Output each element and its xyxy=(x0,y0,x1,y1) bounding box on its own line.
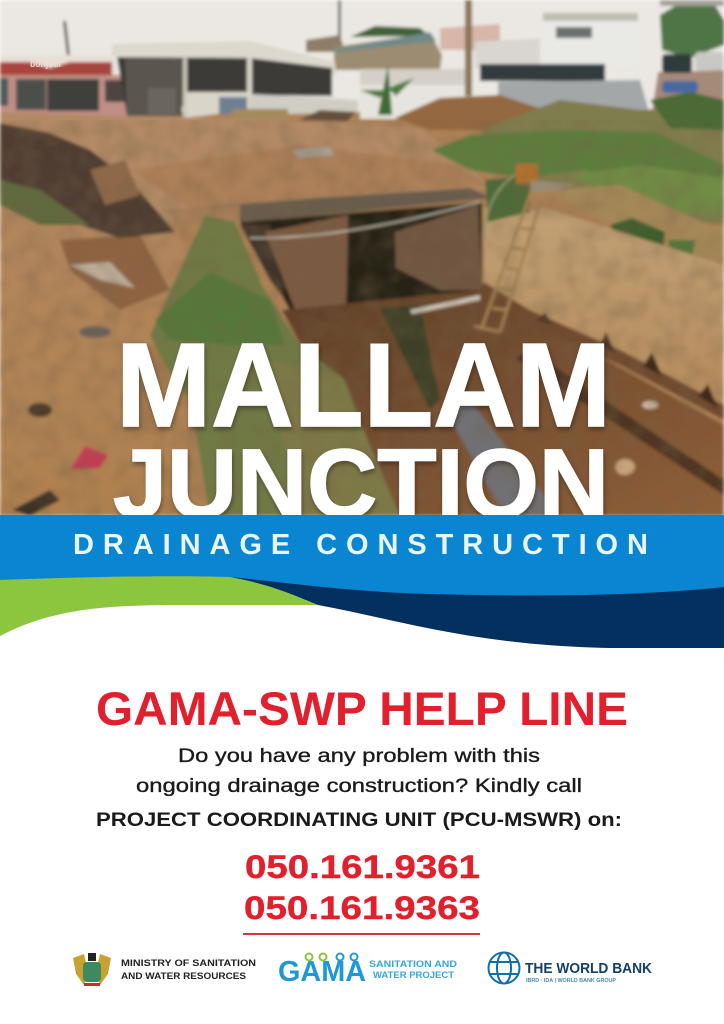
logo: GAMA Sanitation and Water Project: GAMA xyxy=(278,956,366,988)
culvert opening xyxy=(240,202,482,310)
help line heading: GAMA-SWP HELP LINE xyxy=(96,682,628,735)
help line instructions: PROJECT COORDINATING UNIT (PCU-MSWR) on: xyxy=(96,809,622,831)
lower left dirt xyxy=(2,208,164,242)
soil heap behind culvert xyxy=(395,95,545,130)
icon: Ghana coat of arms xyxy=(73,953,111,986)
logo: GAMA Sanitation and Water Project: WATER PROJECT xyxy=(373,970,454,981)
shop sign: bonjour xyxy=(30,59,62,70)
logo: Ministry of Sanitation and Water Resources: MINISTRY OF SANITATION xyxy=(121,958,256,969)
banner subtitle: DRAINAGE CONSTRUCTION xyxy=(73,529,648,561)
water pump xyxy=(516,164,538,184)
grassy verge xyxy=(149,214,358,515)
green bank upper right xyxy=(480,100,724,225)
sky xyxy=(0,0,724,120)
channel floor xyxy=(282,290,724,516)
title: MALLAM: MALLAM xyxy=(116,319,611,452)
hose xyxy=(250,202,480,238)
dark soil mound xyxy=(0,123,175,238)
help line instructions: Do you have any problem with this xyxy=(178,745,540,767)
phone numbers xyxy=(243,849,480,935)
logo: GAMA Sanitation and Water Project xyxy=(278,954,457,988)
title: JUNCTION: JUNCTION xyxy=(113,429,609,538)
white lower background xyxy=(0,605,724,1024)
phone numbers: 050.161.9361 xyxy=(245,849,480,885)
photo: drainage culvert construction site xyxy=(0,0,724,538)
help line instructions: ongoing drainage construction? Kindly call xyxy=(136,775,582,797)
ground base xyxy=(96,110,724,515)
logo: Ministry of Sanitation and Water Resources xyxy=(73,953,256,986)
bonjour shop xyxy=(0,55,127,116)
logo: The World Bank xyxy=(488,952,652,984)
culvert slab xyxy=(228,186,488,224)
background buildings and trees xyxy=(63,0,724,125)
channel right wall xyxy=(484,208,724,415)
banner: blue band with waves xyxy=(0,515,724,1024)
upper dirt ground xyxy=(0,112,490,230)
icon: people heads xyxy=(306,954,358,960)
phone numbers: 050.161.9363 xyxy=(244,890,480,926)
culvert pillar xyxy=(265,215,348,318)
logo: The World Bank: IBRD · IDA | WORLD BANK GROUP xyxy=(526,978,616,984)
icon: globe xyxy=(488,952,520,984)
concrete building xyxy=(112,41,358,124)
litter xyxy=(70,446,108,470)
help line instructions xyxy=(96,745,622,831)
logo: GAMA Sanitation and Water Project: SANITATION AND xyxy=(369,959,457,970)
logo: Ministry of Sanitation and Water Resources: AND WATER RESOURCES xyxy=(121,971,246,982)
logo: The World Bank: THE WORLD BANK xyxy=(525,961,652,977)
ladder xyxy=(474,192,543,332)
